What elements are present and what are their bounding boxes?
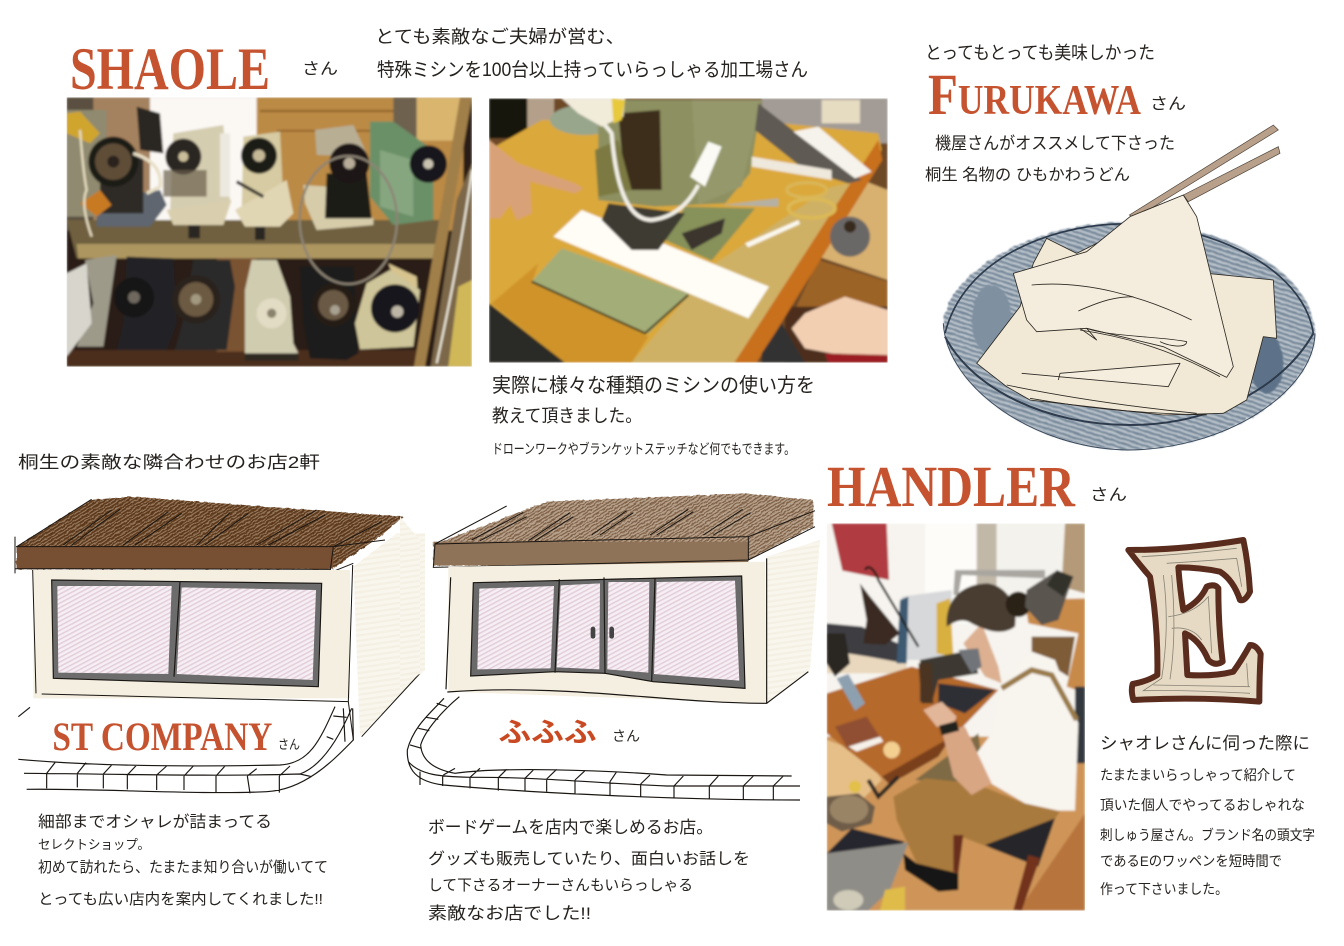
heading: FURUKAWA: FURUKAWA — [928, 62, 1142, 127]
heading: HANDLER: HANDLER — [827, 454, 1076, 519]
text: fufufu description: して下さるオーナーさんもいらっしゃる — [428, 877, 693, 894]
heading: HANDLER: さん — [1090, 486, 1127, 504]
illustration: ST COMPANY storefront — [15, 497, 425, 793]
photo: sewing machine demonstration — [489, 98, 888, 363]
text: HANDLER description: 頂いた個人でやってるおしゃれな — [1100, 797, 1305, 813]
text: ST COMPANY description: 初めて訪れたら、たまたま知り合いが働いてて — [38, 859, 328, 876]
roof — [15, 497, 403, 573]
photo: embroiderer at work — [827, 523, 1085, 911]
text: HANDLER description: 刺しゅう屋さん。ブランド名の頭文字 — [1100, 827, 1315, 843]
wall and window — [33, 565, 419, 740]
text: fufufu description: ボードゲームを店内で楽しめるお店。 — [428, 818, 713, 837]
text: HANDLER description: たまたまいらっしゃって紹介して — [1100, 767, 1296, 783]
shop name: ふふふ — [498, 710, 597, 750]
text: ST COMPANY description — [38, 813, 328, 908]
shop name: ST COMPANY — [52, 714, 272, 759]
text: ST COMPANY description: とっても広い店内を案内してくれました!! — [38, 891, 323, 908]
text: fufufu description: グッズも販売していたり、面白いお話しを — [428, 850, 750, 868]
left neighbour hatching — [400, 517, 420, 690]
caption: sewing demonstration — [492, 374, 815, 457]
text: ST COMPANY description: セレクトショップ。 — [38, 837, 150, 852]
photo: shelves of sewing machines — [67, 97, 472, 367]
text: udon description — [925, 134, 1175, 184]
caption: sewing demonstration: 実際に様々な種類のミシンの使い方を — [492, 374, 815, 397]
chopsticks — [1129, 125, 1280, 218]
text: HANDLER description — [1100, 734, 1315, 897]
title: SHAOLE: SHAOLE — [70, 36, 270, 102]
heading: neighbouring shops: 桐生の素敵な隣合わせのお店2軒 — [18, 453, 320, 472]
title: SHAOLE: さん — [302, 60, 338, 78]
label: ST COMPANY san: さん — [278, 737, 300, 752]
intro text: SHAOLE — [375, 27, 808, 81]
curb — [407, 697, 800, 800]
text: HANDLER description: シャオレさんに伺った際に — [1100, 734, 1310, 753]
illustration: embroidered letter E — [1128, 540, 1261, 702]
intro text: SHAOLE: 特殊ミシンを100台以上持っていらっしゃる加工場さん — [377, 59, 808, 81]
text: udon description: 機屋さんがオススメして下さった — [935, 134, 1175, 153]
noodles — [977, 195, 1277, 415]
curb — [18, 707, 353, 793]
text: fufufu description: 素敵なお店でした!! — [428, 904, 591, 923]
heading: FURUKAWA: さん — [1150, 95, 1186, 113]
text: HANDLER description: であるEのワッペンを短時間で — [1100, 853, 1282, 869]
wall and sliding doors — [446, 558, 808, 703]
text: HANDLER description: 作って下さいました。 — [1100, 881, 1228, 897]
intro text: SHAOLE: とても素敵なご夫婦が営む、 — [375, 27, 625, 47]
plate — [943, 223, 1315, 450]
caption: sewing demonstration: ドローンワークやブランケットステッチなど何でもできます。 — [492, 441, 795, 457]
illustration: himokawa udon in a bowl — [943, 125, 1315, 450]
text: fufufu description — [428, 818, 750, 923]
side wall — [767, 540, 820, 703]
illustration: fufufu storefront — [400, 493, 820, 800]
caption: sewing demonstration: 教えて頂きました。 — [492, 406, 642, 426]
roof — [433, 493, 815, 567]
text: ST COMPANY description: 細部までオシャレが詰まってる — [38, 813, 272, 831]
heading: FURUKAWA: とってもとっても美味しかった — [925, 43, 1155, 63]
text: udon description: 桐生 名物の ひもかわうどん — [925, 166, 1130, 184]
side wall — [353, 533, 425, 737]
label: fufufu san: さん — [612, 728, 640, 744]
